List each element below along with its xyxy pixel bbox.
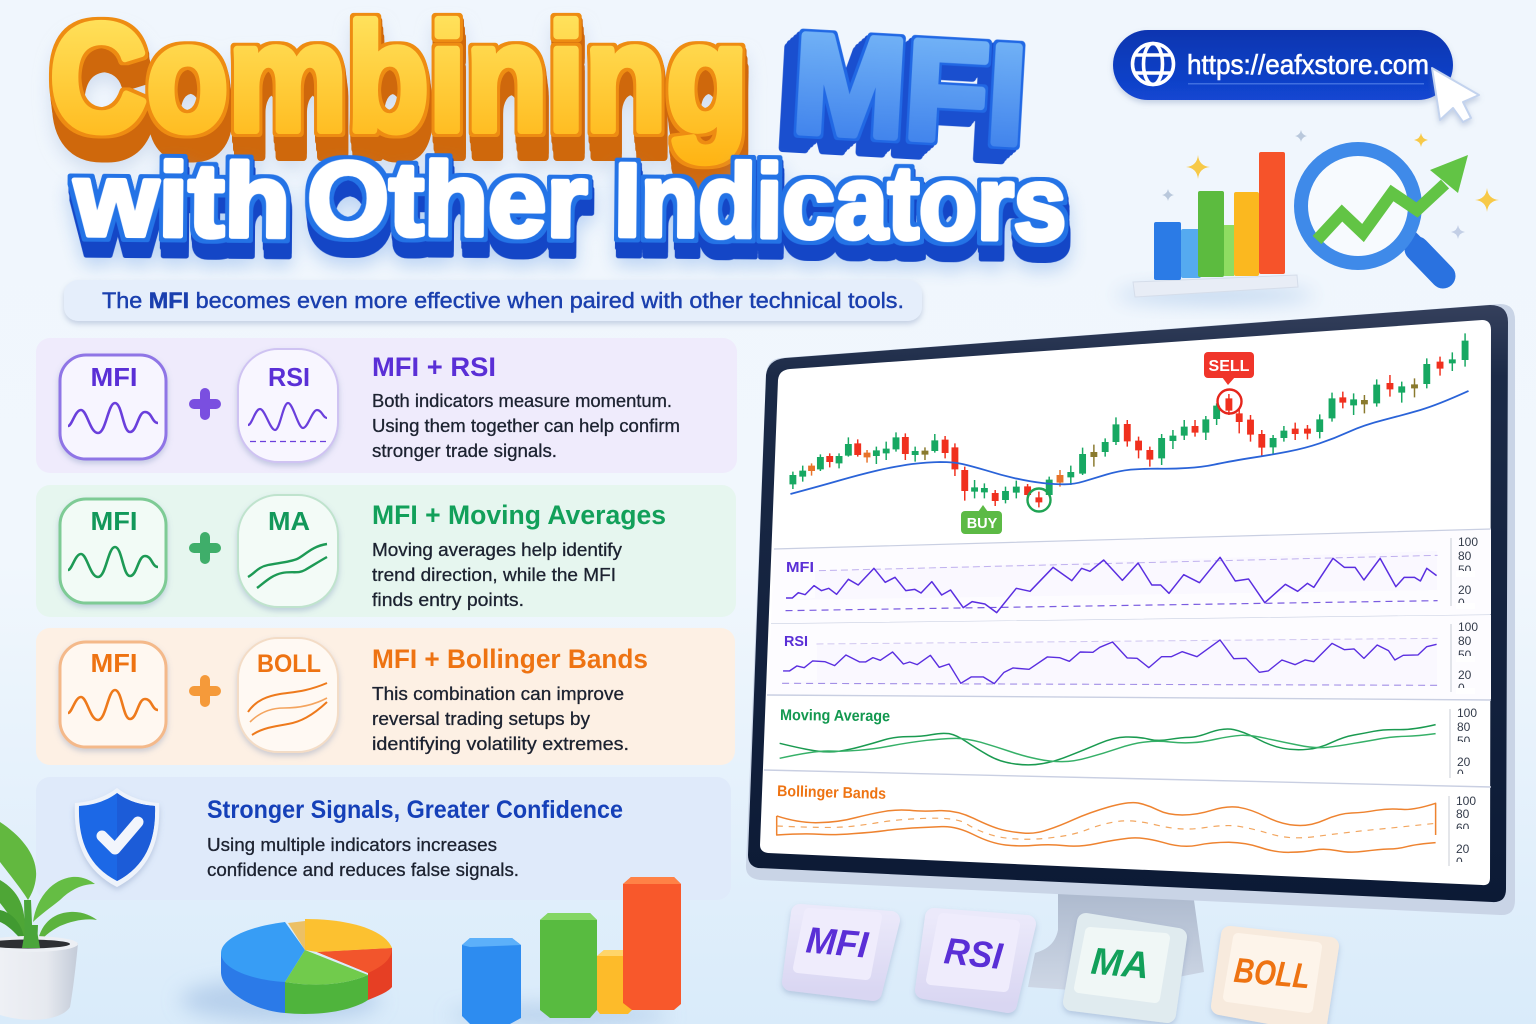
keycap: MFI — [791, 913, 891, 992]
panel: MFI + Bollinger Bands — [36, 628, 735, 765]
heading: MFI + Moving Averages — [372, 500, 666, 530]
body text: trend direction, while the MFI — [372, 564, 616, 585]
icon: plus — [194, 393, 216, 415]
axis labels: 80 — [1456, 807, 1470, 821]
monitor frame — [746, 304, 1515, 915]
axis labels — [1458, 535, 1478, 610]
body text: Using them together can help confirm — [372, 415, 680, 436]
keycap: MA: MA — [1089, 941, 1151, 987]
axis labels: 0 — [1458, 681, 1465, 695]
icon tile: MFI — [60, 355, 166, 459]
body text: confidence and reduces false signals. — [207, 859, 519, 880]
monitor screen — [760, 320, 1491, 885]
panel: Bollinger Bands sub-chart: Bollinger Bands — [777, 783, 886, 803]
icon: globe — [1132, 44, 1174, 84]
panel: Stronger Signals — [36, 777, 731, 900]
axis labels: 50 — [1458, 648, 1472, 662]
keycap: RSI — [924, 917, 1027, 1004]
axis labels: 80 — [1457, 720, 1471, 734]
axis labels: 60 — [1456, 821, 1470, 835]
3D bar chart — [450, 877, 681, 1024]
icon tile: MA — [238, 495, 338, 607]
keycap: MA — [1072, 922, 1178, 1014]
icon tile: MFI — [60, 642, 166, 747]
panel: MFI + RSI — [36, 338, 737, 473]
icon tile: MFI: MFI — [90, 506, 138, 536]
title line: with Other Indicators: Indicators — [614, 143, 1067, 263]
keycap: BOLL — [1220, 935, 1330, 1024]
icon: shield — [75, 788, 159, 887]
heading: MFI + Bollinger Bands — [372, 644, 648, 674]
axis labels: 100 — [1457, 706, 1477, 720]
panel: MFI sub-chart — [771, 529, 1491, 624]
title word: MFI: MFI — [789, 4, 1030, 174]
body text: reversal trading setups by — [372, 708, 591, 729]
axis labels — [1456, 794, 1476, 869]
icon: plus — [194, 537, 216, 559]
axis labels: 50 — [1458, 563, 1472, 577]
axis labels: 0 — [1457, 767, 1464, 781]
keycap: MFI: MFI — [804, 919, 870, 966]
body text: stronger trade signals. — [372, 440, 557, 461]
panel: RSI sub-chart: RSI — [784, 633, 808, 650]
moving average line — [790, 391, 1469, 494]
icon tile: RSI — [238, 349, 338, 462]
icon tile: RSI: RSI — [268, 362, 310, 392]
axis labels: 50 — [1457, 734, 1471, 748]
panel: price chart — [790, 333, 1469, 534]
pot — [0, 943, 78, 1020]
heading: Stronger Signals, Greater Confidence — [207, 796, 623, 824]
axis labels: 0 — [1458, 596, 1465, 610]
buy marker: BUY — [967, 516, 998, 532]
keycap: BOLL: BOLL — [1232, 951, 1312, 996]
icon: magnifier with arrow — [1301, 149, 1468, 276]
subtitle text: The MFI becomes even more effective when paired with other technical tools. — [102, 288, 904, 313]
panel: MFI sub-chart: MFI — [786, 560, 814, 576]
sparkles — [1162, 130, 1499, 239]
icon tile: MA: MA — [268, 506, 310, 536]
icon tile: MFI — [60, 499, 166, 603]
panel: Moving Average sub-chart — [764, 695, 1491, 787]
axis labels: 20 — [1457, 755, 1471, 769]
panel: Bollinger Bands sub-chart — [777, 783, 1476, 869]
body text: identifying volatility extremes. — [372, 733, 629, 754]
icon tile: BOLL: BOLL — [257, 650, 321, 678]
monitor stand — [1028, 880, 1204, 992]
sell marker: SELL — [1209, 358, 1250, 375]
body text — [372, 539, 623, 610]
axis labels: 80 — [1458, 549, 1472, 563]
panel: Moving Average sub-chart: Moving Average — [780, 707, 890, 725]
body text — [207, 834, 519, 880]
axis labels: 0 — [1456, 855, 1463, 869]
body text: Using multiple indicators increases — [207, 834, 497, 855]
axis labels: 20 — [1456, 842, 1470, 856]
icon tile: BOLL — [238, 638, 338, 752]
panel: MFI + Moving Averages — [36, 485, 736, 617]
axis labels — [1457, 706, 1477, 781]
subtitle pill — [64, 280, 922, 321]
axis labels: 20 — [1458, 668, 1472, 682]
body text: Both indicators measure momentum. — [372, 390, 672, 411]
icon: cursor — [1432, 68, 1479, 122]
body text: finds entry points. — [372, 589, 524, 610]
url pill — [1113, 30, 1479, 122]
axis labels: 100 — [1456, 794, 1476, 808]
axis labels: 20 — [1458, 583, 1472, 597]
icon tile: MFI: MFI — [90, 648, 138, 678]
buy marker — [961, 488, 1050, 534]
pie chart — [180, 919, 392, 1022]
title line: with Other Indicators — [73, 138, 1067, 267]
monitor — [746, 304, 1515, 915]
axis labels: 100 — [1458, 535, 1478, 549]
candlesticks — [790, 333, 1469, 507]
axis labels — [1458, 620, 1478, 695]
title line: with Other Indicators: with — [73, 142, 291, 260]
url text: https://eafxstore.com — [1187, 49, 1429, 80]
panel: RSI sub-chart — [767, 615, 1491, 699]
title line: with Other Indicators: Other — [307, 141, 588, 260]
body text: Moving averages help identify — [372, 539, 623, 560]
icon: bar chart top right — [1115, 152, 1315, 303]
icon: plus — [194, 680, 216, 702]
icon tile: MFI: MFI — [90, 362, 138, 392]
body text — [372, 390, 680, 461]
axis labels: 100 — [1458, 620, 1478, 634]
axis labels: 80 — [1458, 634, 1472, 648]
body text — [372, 683, 629, 754]
heading: MFI + RSI — [372, 352, 496, 382]
icon: plant — [0, 822, 97, 1020]
keycap: RSI: RSI — [942, 930, 1005, 977]
sell marker — [1204, 352, 1254, 414]
title — [50, 0, 1067, 267]
body text: This combination can improve — [372, 683, 624, 704]
